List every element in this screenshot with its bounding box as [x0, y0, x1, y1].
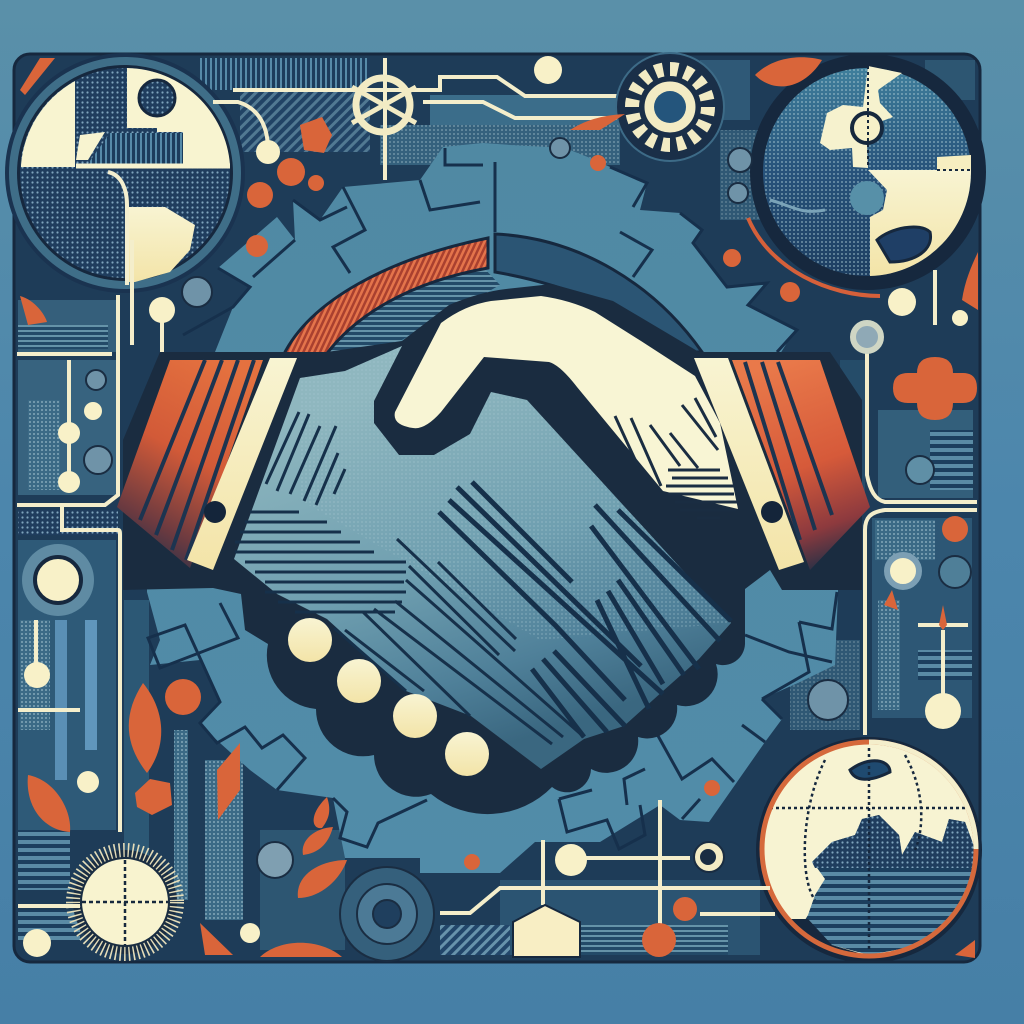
left globe [7, 55, 243, 291]
gear tooth outlines [148, 148, 837, 849]
hand shading lines [235, 412, 731, 744]
bottom left dial [73, 850, 177, 954]
left cuff [187, 358, 297, 570]
knuckle dots [288, 618, 489, 776]
big gear [147, 143, 838, 873]
bottom right globe [756, 737, 982, 963]
cuff buttons [204, 501, 783, 523]
small grey gears [84, 138, 971, 961]
right globe [748, 54, 986, 296]
arc: dark blue band [495, 234, 702, 352]
gear icon: wheel [352, 78, 416, 132]
arc: orange band [283, 238, 488, 356]
right cuff [694, 358, 804, 570]
arc: hatched band under orange arc [325, 267, 500, 357]
house icon [513, 905, 580, 957]
right sleeve [732, 360, 870, 570]
blue hand [234, 346, 731, 769]
gear icon: top cream gear [616, 53, 724, 161]
cream hand [395, 296, 738, 518]
left sleeve [117, 360, 263, 568]
dark handshake silhouette [123, 284, 862, 814]
